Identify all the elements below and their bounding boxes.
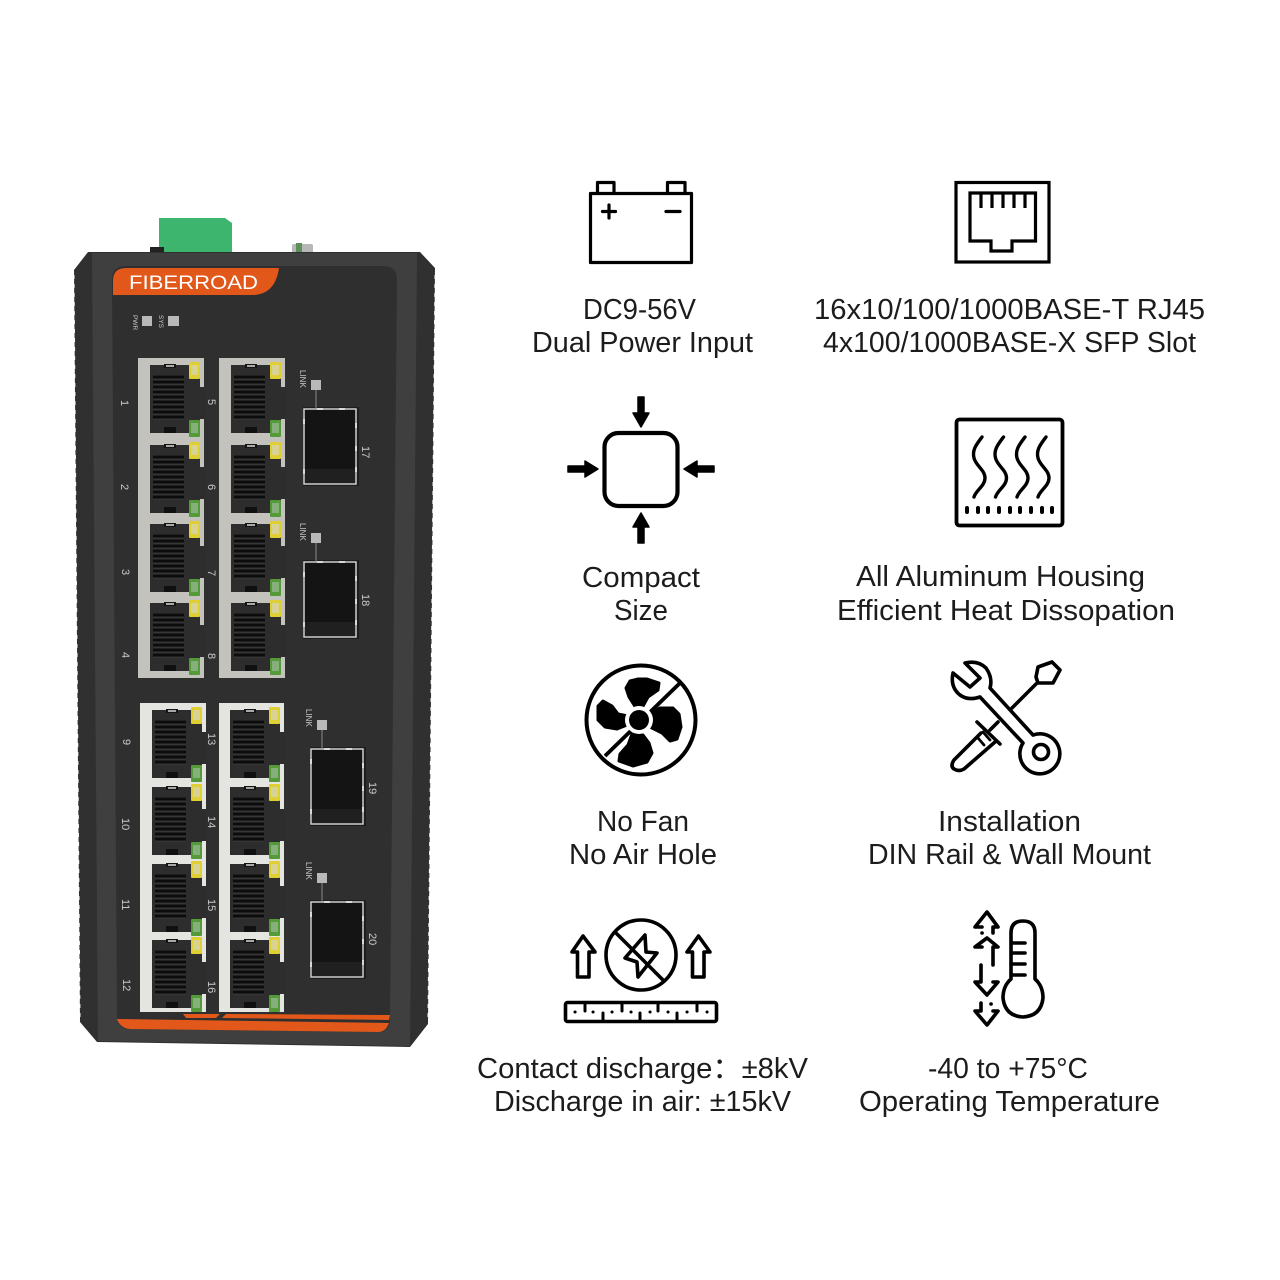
text: ports — [814, 294, 1205, 359]
device body — [74, 252, 435, 1047]
text: no fan: No Fan — [597, 806, 689, 838]
inner panel — [112, 266, 397, 1032]
text: aluminum: All Aluminum Housing — [856, 561, 1145, 593]
text: installation: DIN Rail & Wall Mount — [868, 839, 1151, 871]
text: temperature — [859, 1053, 1160, 1118]
icon: compact square with arrows — [568, 397, 714, 543]
text: ESD: Discharge in air: ±15kV — [494, 1086, 792, 1118]
feature: installation — [868, 662, 1151, 871]
RJ45 block: ports 9-12 — [140, 703, 207, 1012]
feature: dual power — [532, 182, 753, 359]
text: no fan — [569, 806, 717, 871]
port numbers: 20 — [366, 933, 378, 945]
text: power: DC9-56V — [583, 294, 697, 326]
green power terminal — [159, 218, 232, 254]
text: power — [532, 294, 753, 359]
port numbers: 13 — [205, 733, 217, 745]
port numbers: 19 — [366, 782, 378, 794]
ground screw — [292, 243, 313, 253]
port numbers: 17 — [359, 446, 371, 458]
logo text: FIBERROAD — [129, 272, 258, 294]
RJ45 block: ports 5-8 — [219, 358, 286, 678]
port numbers: 18 — [359, 594, 371, 606]
icon: battery — [590, 182, 692, 262]
body front plate — [92, 253, 417, 1046]
port numbers: 11 — [119, 899, 131, 910]
port numbers: 9 — [120, 739, 132, 745]
icon: wrench and screwdriver — [952, 662, 1060, 774]
text: installation — [868, 806, 1151, 871]
port numbers: 7 — [205, 570, 217, 576]
text: aluminum — [837, 561, 1175, 627]
RJ45 block: ports 13-16 — [219, 703, 285, 1012]
feature: temperature — [859, 912, 1160, 1118]
feature: no fan — [569, 666, 717, 871]
port numbers: 6 — [205, 484, 217, 490]
text: compact: Size — [614, 595, 668, 627]
feature: ESD protection — [477, 920, 809, 1118]
text: compact: Compact — [582, 562, 700, 594]
text: power: Dual Power Input — [532, 327, 753, 359]
SFP slots 17-20: LINK — [304, 709, 313, 727]
port numbers: 8 — [205, 653, 217, 659]
feature: ports — [814, 182, 1205, 359]
text: ports: 16x10/100/1000BASE-T RJ45 — [814, 294, 1205, 326]
port numbers: 15 — [205, 899, 217, 911]
serrated edges — [74, 275, 436, 1018]
port numbers — [118, 399, 378, 993]
feature: aluminum housing — [837, 420, 1175, 627]
icon: heat dissipation — [956, 420, 1062, 526]
port numbers: 14 — [205, 816, 217, 828]
orange logo tab — [113, 268, 279, 295]
icon: RJ45 port — [956, 182, 1049, 262]
text: aluminum: Efficient Heat Dissopation — [837, 595, 1175, 627]
status LEDs — [131, 315, 179, 330]
port numbers: 10 — [119, 818, 131, 830]
port numbers: 12 — [120, 979, 132, 991]
text: temperature: -40 to +75°C — [928, 1053, 1088, 1085]
power switch tab — [150, 247, 164, 253]
SFP slots 17-20 — [298, 370, 366, 979]
RJ45 block: ports 1-4 — [138, 358, 205, 678]
icon: thermometer and arrows — [975, 912, 1043, 1025]
SFP slots 17-20: LINK — [304, 862, 313, 880]
panel: switch device — [74, 218, 436, 1047]
SFP slots 17-20: LINK — [298, 370, 307, 388]
port numbers: 4 — [119, 652, 131, 658]
icon: anti-static — [566, 920, 716, 1022]
text: compact — [582, 562, 700, 627]
text: installation: Installation — [938, 806, 1081, 838]
icon: crossed fan — [586, 666, 696, 774]
text: temperature: Operating Temperature — [859, 1086, 1160, 1118]
orange bottom stripes — [117, 1014, 390, 1032]
port numbers: 16 — [205, 981, 217, 993]
status LEDs: PWR — [131, 315, 138, 330]
text: no fan: No Air Hole — [569, 839, 717, 871]
port numbers: 3 — [119, 569, 131, 575]
SFP slots 17-20: LINK — [298, 523, 307, 541]
feature: compact size — [568, 397, 714, 627]
status LEDs: SYS — [157, 315, 164, 329]
text: ESD — [477, 1053, 809, 1118]
port numbers: 5 — [205, 399, 217, 405]
port numbers: 1 — [118, 400, 130, 406]
text: ESD: Contact discharge：±8kV — [477, 1053, 809, 1085]
port numbers: 2 — [118, 484, 130, 490]
text: ports: 4x100/1000BASE-X SFP Slot — [823, 327, 1196, 359]
